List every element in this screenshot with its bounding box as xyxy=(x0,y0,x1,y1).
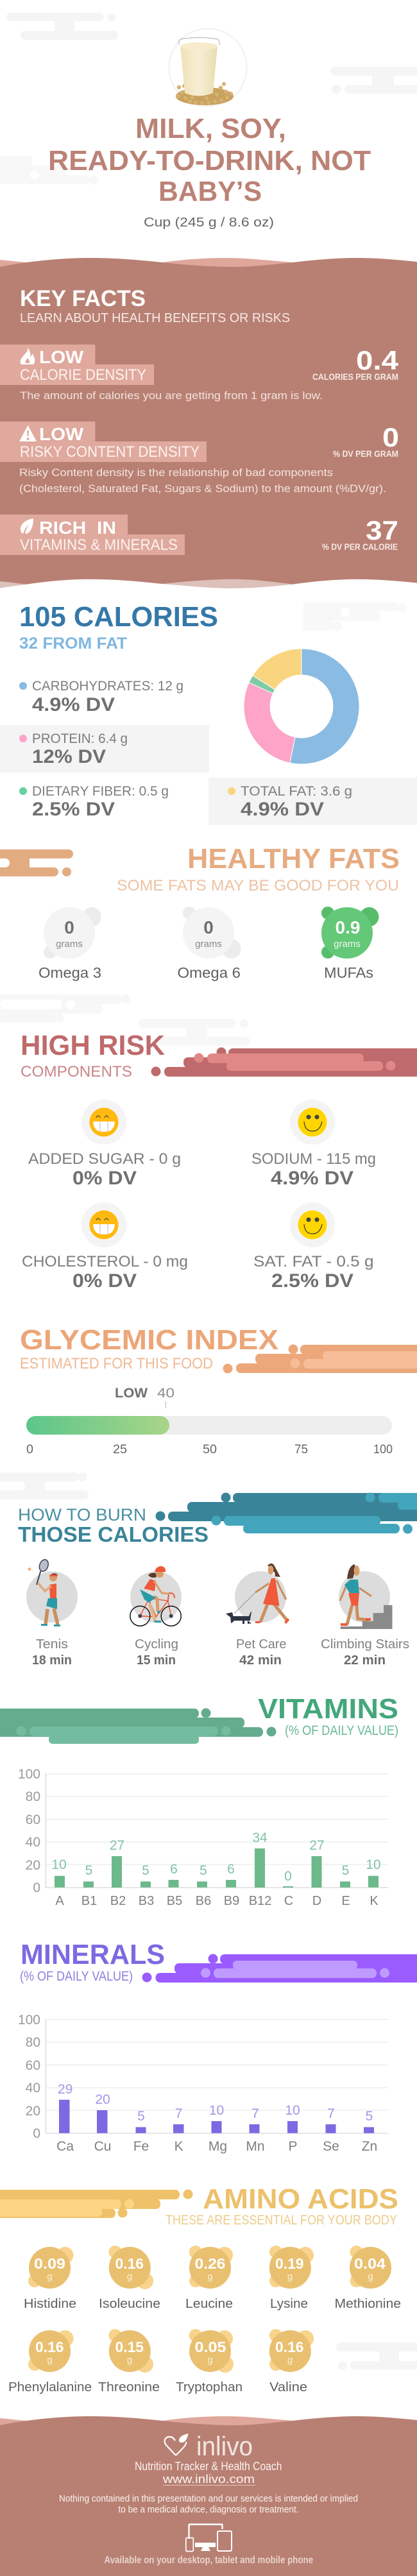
bar chart: minerals: 100 xyxy=(18,2013,40,2027)
item: omega 3: grams xyxy=(56,939,83,950)
title: READY-TO-DRINK, NOT xyxy=(48,145,371,176)
label: rich in: RICH IN xyxy=(39,518,116,538)
bar chart: vitamins: 6 xyxy=(227,1862,235,1877)
gauge scale: 25 xyxy=(113,1443,127,1456)
item: valine: g xyxy=(287,2355,293,2366)
item: tryptophan: 0.05 xyxy=(195,2339,226,2355)
amino acid bubbles row 1 xyxy=(24,2246,401,2311)
panel: vitamins xyxy=(0,1693,398,1908)
logo: inlivo: inlivo xyxy=(196,2431,253,2461)
legend: total fat xyxy=(208,778,417,825)
item: leucine xyxy=(185,2246,233,2311)
bar chart: minerals: K xyxy=(174,2139,183,2154)
panel: key facts xyxy=(0,258,417,588)
legend: dietary fiber xyxy=(19,784,169,820)
item: omega 6: grams xyxy=(195,939,222,950)
decorative stripes xyxy=(151,1047,417,1077)
value: 0: 0 xyxy=(382,422,399,452)
label: vitamins and minerals: VITAMINS & MINERALS xyxy=(20,536,178,554)
item: saturated fat xyxy=(253,1202,373,1292)
heading xyxy=(18,1505,208,1546)
bar chart: minerals: 80 xyxy=(26,2035,40,2050)
title: MILK, SOY, xyxy=(135,113,286,144)
unit: CALORIES PER GRAM xyxy=(312,371,398,382)
activity: tennis xyxy=(26,1558,78,1626)
bar chart: vitamins: B12 xyxy=(249,1894,271,1908)
activity: cycling xyxy=(130,1566,182,1626)
heading: calories: 105 CALORIES xyxy=(19,601,218,633)
bar chart: vitamins: 27 xyxy=(110,1838,124,1853)
gauge scale: 0 xyxy=(26,1443,33,1456)
decorative stripes xyxy=(223,1345,417,1373)
legend: total fat: 4.9% DV xyxy=(241,799,324,820)
item: sodium xyxy=(251,1100,376,1189)
bar chart: minerals: P xyxy=(288,2139,298,2154)
disclaimer: Nothing contained in this presentation and our services is intended or implied xyxy=(59,2493,358,2504)
bar chart: minerals: 5 xyxy=(137,2109,145,2124)
subheading: LEARN ABOUT HEALTH BENEFITS OR RISKS xyxy=(20,311,290,325)
item: sodium: 4.9% DV xyxy=(271,1168,353,1189)
bar chart: minerals: Mn xyxy=(246,2139,265,2154)
bar chart: minerals: 7 xyxy=(327,2106,335,2121)
label: pet care xyxy=(236,1637,286,1668)
legend: carbohydrates xyxy=(19,679,183,715)
subheading: SOME FATS MAY BE GOOD FOR YOU xyxy=(117,877,399,894)
item: lysine: g xyxy=(287,2271,293,2282)
item: isoleucine: g xyxy=(127,2271,132,2282)
item: phenylalanine: 0.16 xyxy=(35,2339,64,2355)
item: phenylalanine: g xyxy=(47,2355,53,2366)
heading: HOW TO BURN xyxy=(18,1505,146,1524)
label: climbing stairs: Climbing Stairs xyxy=(321,1637,409,1651)
description xyxy=(19,466,386,495)
heading: key facts: KEY FACTS xyxy=(20,286,146,311)
legend: protein: 12% DV xyxy=(32,746,106,767)
panel: amino acids xyxy=(0,2183,417,2394)
subheading: from fat: 32 FROM FAT xyxy=(19,635,127,653)
item: lysine: 0.19 xyxy=(275,2255,304,2272)
bar chart: vitamins xyxy=(18,1767,388,1908)
gauge scale: 100 xyxy=(373,1443,393,1456)
item: cholesterol: 0% DV xyxy=(72,1270,137,1292)
item: isoleucine xyxy=(99,2246,160,2311)
item: histidine xyxy=(24,2247,76,2311)
item: added sugar xyxy=(28,1100,181,1189)
item: cholesterol: CHOLESTEROL - 0 mg xyxy=(22,1253,188,1270)
bar chart: vitamins: B1 xyxy=(81,1894,97,1908)
item: cholesterol xyxy=(22,1202,188,1292)
item: omega 6 xyxy=(177,907,241,981)
legend: protein xyxy=(0,725,209,772)
bar chart: minerals xyxy=(18,2013,388,2154)
panel: footer xyxy=(0,2416,417,2576)
item: leucine: Leucine xyxy=(185,2297,233,2311)
item: tryptophan: Tryptophan xyxy=(176,2380,243,2394)
item: omega 3 xyxy=(38,907,101,981)
item: methionine xyxy=(335,2246,401,2311)
bar chart: minerals: 7 xyxy=(175,2106,182,2121)
bar chart: vitamins: 40 xyxy=(26,1835,40,1850)
item: sodium: SODIUM - 115 mg xyxy=(251,1150,376,1168)
item: omega 3: Omega 3 xyxy=(38,964,101,981)
bar chart: vitamins: 34 xyxy=(252,1830,268,1845)
bar chart: minerals: 20 xyxy=(95,2092,110,2107)
panel: high risk components xyxy=(0,994,417,1292)
description: (Cholesterol, Saturated Fat, Sugars & Sodium) to the amount (%DV/gr). xyxy=(19,482,386,495)
item: isoleucine: Isoleucine xyxy=(99,2297,160,2311)
decorative stripes xyxy=(0,1708,276,1744)
title xyxy=(48,113,371,207)
item: histidine: g xyxy=(47,2271,53,2282)
legend: dietary fiber: DIETARY FIBER: 0.5 g xyxy=(32,784,169,799)
bar chart: vitamins: 27 xyxy=(309,1838,325,1853)
bar chart: minerals: 7 xyxy=(251,2106,259,2121)
bar chart: minerals: 10 xyxy=(285,2103,300,2118)
panel: minerals xyxy=(18,1939,417,2154)
item: methionine: Methionine xyxy=(335,2297,401,2311)
item: MUFAs: 0.9 xyxy=(336,917,360,937)
item: lysine: Lysine xyxy=(270,2297,308,2311)
item: phenylalanine xyxy=(8,2330,92,2394)
bar chart: minerals: Se xyxy=(323,2139,339,2154)
bar chart: vitamins: B6 xyxy=(196,1894,211,1908)
bar chart: minerals: 5 xyxy=(366,2109,373,2124)
item: valine: 0.16 xyxy=(275,2339,304,2355)
description: The amount of calories you are getting from 1 gram is low. xyxy=(20,389,323,402)
bar chart: vitamins: B2 xyxy=(110,1894,126,1908)
icon: flame xyxy=(21,348,35,364)
donut chart xyxy=(244,649,359,764)
item: threonine: Threonine xyxy=(98,2380,160,2394)
item: saturated fat: SAT. FAT - 0.5 g xyxy=(253,1253,373,1270)
availability note: Available on your desktop, tablet and mobile phone xyxy=(104,2555,313,2566)
marker: low 40 xyxy=(115,1386,174,1408)
decorative stripes xyxy=(155,1492,417,1533)
icon: devices xyxy=(186,2524,232,2551)
panel: calories xyxy=(0,601,417,825)
label: tennis xyxy=(32,1637,72,1668)
food image: glass of soy milk xyxy=(169,28,246,107)
item: threonine: g xyxy=(127,2355,132,2366)
label: cycling xyxy=(135,1637,178,1668)
value: 0.4: 0.4 xyxy=(356,345,399,375)
bar chart: vitamins: B5 xyxy=(167,1894,182,1908)
heading: healthy fats: HEALTHY FATS xyxy=(187,843,400,874)
amino acid bubbles row 2 xyxy=(8,2329,314,2394)
item: isoleucine: 0.16 xyxy=(115,2255,144,2272)
serving size: Cup (245 g / 8.6 oz) xyxy=(144,216,274,230)
gauge scale: 75 xyxy=(294,1443,308,1456)
icon: warning triangle xyxy=(19,425,37,441)
item: omega 3: 0 xyxy=(64,917,74,937)
bar chart: minerals: Cu xyxy=(94,2139,111,2154)
unit: % DV PER CALORIE xyxy=(322,542,398,552)
item: histidine: 0.09 xyxy=(34,2255,65,2272)
bar chart: vitamins: 10 xyxy=(366,1857,381,1872)
fact: calorie density xyxy=(0,345,399,402)
gauge scale xyxy=(26,1443,393,1456)
item: tryptophan: g xyxy=(207,2355,213,2366)
item: threonine: 0.15 xyxy=(115,2339,144,2355)
bar chart: minerals: 60 xyxy=(26,2058,40,2073)
heading: THOSE CALORIES xyxy=(18,1523,208,1546)
item: MUFAs: MUFAs xyxy=(324,964,373,981)
heading: minerals: MINERALS xyxy=(21,1939,165,1970)
gauge scale: 50 xyxy=(203,1443,217,1456)
bar chart: vitamins: A xyxy=(55,1894,64,1908)
label: calorie density: CALORIE DENSITY xyxy=(20,366,146,384)
item: leucine: 0.26 xyxy=(195,2255,226,2272)
item: saturated fat: 2.5% DV xyxy=(271,1270,353,1292)
label: low: LOW xyxy=(39,347,84,367)
heading: glycemic index: GLYCEMIC INDEX xyxy=(20,1324,278,1356)
fact: rich in vitamins and minerals xyxy=(0,515,398,555)
heading: vitamins: VITAMINS xyxy=(258,1693,398,1725)
label: climbing stairs xyxy=(321,1637,409,1668)
subheading: (% OF DAILY VALUE) xyxy=(20,1969,133,1984)
item: leucine: g xyxy=(207,2271,213,2282)
bar chart: vitamins: 0 xyxy=(33,1881,40,1895)
bar chart: minerals: Fe xyxy=(133,2139,149,2154)
item: methionine: 0.04 xyxy=(354,2255,386,2272)
decorative stripes xyxy=(142,1954,417,1983)
legend: carbohydrates: 4.9% DV xyxy=(32,694,115,715)
bar chart: minerals: Zn xyxy=(362,2139,377,2154)
bar chart: vitamins: C xyxy=(284,1894,293,1908)
bar chart: minerals: 10 xyxy=(209,2103,224,2118)
bar chart: minerals: Ca xyxy=(56,2139,74,2154)
bar chart: vitamins: 20 xyxy=(26,1858,40,1873)
bar chart: vitamins: 5 xyxy=(200,1863,207,1878)
logo: inlivo xyxy=(165,2431,253,2461)
icon: leaf xyxy=(21,518,33,534)
bar chart: vitamins: E xyxy=(341,1894,350,1908)
bar chart: vitamins: 100 xyxy=(18,1767,40,1782)
bar chart: vitamins: 6 xyxy=(170,1862,178,1877)
bar chart: vitamins: D xyxy=(312,1894,321,1908)
legend: total fat: TOTAL FAT: 3.6 g xyxy=(241,784,352,799)
marker: low 40: 40 xyxy=(157,1386,174,1401)
bar chart: vitamins: 10 xyxy=(51,1857,67,1872)
item: added sugar: 0% DV xyxy=(72,1168,137,1189)
bar chart: vitamins: B3 xyxy=(139,1894,154,1908)
legend: dietary fiber: 2.5% DV xyxy=(32,799,115,820)
label: pet care: 42 min xyxy=(239,1653,282,1668)
bar chart: vitamins: 80 xyxy=(26,1789,40,1804)
subheading: (% OF DAILY VALUE) xyxy=(285,1723,398,1738)
activity labels xyxy=(32,1637,409,1668)
label: risky content density: RISKY CONTENT DENSITY xyxy=(20,443,200,461)
item: tryptophan xyxy=(176,2329,243,2394)
subheading: components: COMPONENTS xyxy=(21,1063,132,1080)
glycemic gauge bar xyxy=(26,1416,392,1435)
label: low: LOW xyxy=(39,424,84,444)
tagline: Nutrition Tracker & Health Coach xyxy=(135,2460,282,2473)
bar chart: vitamins: B9 xyxy=(224,1894,239,1908)
item: MUFAs xyxy=(321,907,379,981)
panel: glycemic index xyxy=(20,1324,417,1456)
unit: % DV PER GRAM xyxy=(333,448,398,459)
fact: risky content density xyxy=(0,422,399,495)
panel: healthy fats xyxy=(0,843,400,981)
disclaimer: to be a medical advice, diagnosis or treatment. xyxy=(118,2504,299,2515)
activity: pet care xyxy=(226,1564,289,1624)
item: histidine: Histidine xyxy=(24,2297,76,2311)
label: pet care: Pet Care xyxy=(236,1637,286,1651)
decorative stripes xyxy=(0,2189,192,2218)
item: lysine xyxy=(269,2246,314,2311)
disclaimer xyxy=(59,2493,358,2515)
heading: amino acids: AMINO ACIDS xyxy=(203,2183,398,2215)
bar chart: minerals: 29 xyxy=(58,2082,72,2097)
website link: www.inlivo.com xyxy=(162,2473,255,2486)
title: BABY’S xyxy=(158,176,262,207)
bar chart: minerals: Mg xyxy=(208,2139,227,2154)
item: MUFAs: grams xyxy=(334,939,361,950)
bar chart: vitamins: 0 xyxy=(284,1869,292,1884)
legend: carbohydrates: CARBOHYDRATES: 12 g xyxy=(32,679,183,694)
item: threonine xyxy=(98,2329,160,2394)
bar chart: vitamins: 5 xyxy=(85,1863,92,1878)
bar chart: vitamins: 5 xyxy=(342,1863,349,1878)
bar chart: vitamins: K xyxy=(370,1894,379,1908)
label: tennis: Tenis xyxy=(36,1637,68,1651)
item: phenylalanine: Phenylalanine xyxy=(8,2380,92,2394)
item: valine: Valine xyxy=(269,2380,307,2394)
label: cycling: 15 min xyxy=(137,1653,176,1668)
item: omega 6: Omega 6 xyxy=(177,964,241,981)
bar chart: minerals: 0 xyxy=(33,2126,40,2141)
bar chart: vitamins: 5 xyxy=(142,1863,149,1878)
description: Risky Content density is the relationship of bad components xyxy=(19,466,333,479)
item: added sugar: ADDED SUGAR - 0 g xyxy=(28,1150,181,1168)
bar chart: vitamins: 60 xyxy=(26,1813,40,1827)
bar chart: minerals: 40 xyxy=(26,2081,40,2095)
value: 37: 37 xyxy=(366,515,398,545)
item: omega 6: 0 xyxy=(203,917,214,937)
legend: protein: PROTEIN: 6.4 g xyxy=(32,731,128,746)
label: climbing stairs: 22 min xyxy=(344,1653,386,1668)
heading: high risk: HIGH RISK xyxy=(21,1030,165,1061)
marker: low 40: LOW xyxy=(115,1386,148,1401)
activity: climbing stairs xyxy=(339,1564,393,1629)
label: tennis: 18 min xyxy=(32,1653,72,1668)
label: cycling: Cycling xyxy=(135,1637,178,1651)
subheading: ESTIMATED FOR THIS FOOD xyxy=(20,1355,213,1372)
panel: how to burn those calories xyxy=(0,1472,417,1668)
item: valine xyxy=(269,2329,314,2394)
bar chart: minerals: 20 xyxy=(26,2104,40,2119)
item: methionine: g xyxy=(368,2271,373,2282)
background clouds, upper page xyxy=(0,13,417,185)
